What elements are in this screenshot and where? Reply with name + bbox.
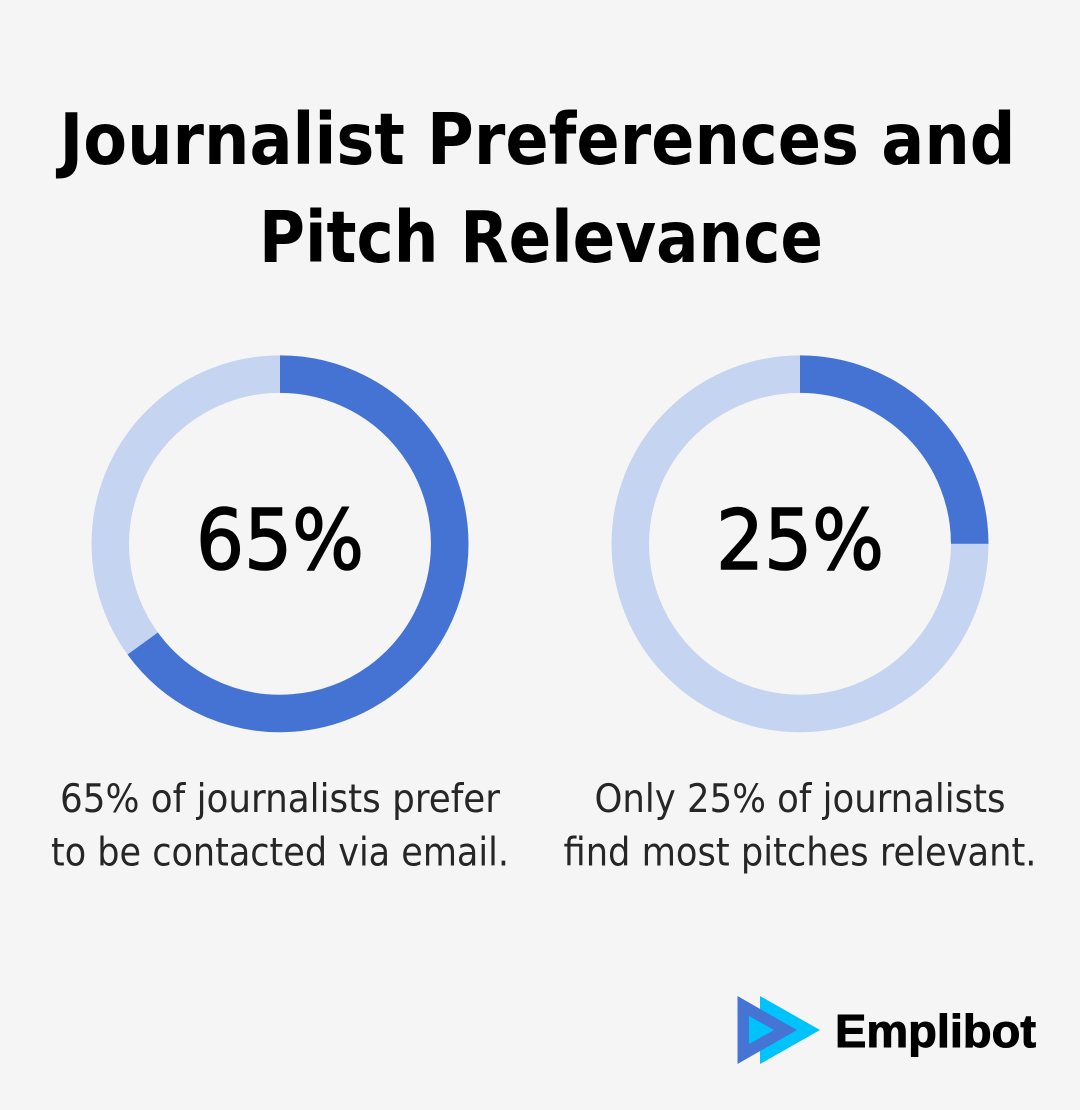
caption: email preference: 65% of journalists prefer bbox=[60, 777, 501, 822]
caption: email preference: to be contacted via email. bbox=[51, 830, 509, 876]
title bbox=[56, 98, 1016, 279]
logo: Emplibot bbox=[738, 996, 1036, 1064]
caption: pitch relevance: find most pitches relevant. bbox=[564, 830, 1036, 876]
caption: pitch relevance bbox=[564, 777, 1036, 876]
icon: play triangles bbox=[738, 996, 820, 1064]
donut chart: 25% bbox=[630, 374, 970, 714]
donut chart: 65%: 65% bbox=[196, 492, 364, 589]
logo wordmark: Emplibot bbox=[835, 1005, 1036, 1057]
donut chart: 25%: 25% bbox=[716, 492, 884, 589]
caption: email preference bbox=[51, 777, 509, 876]
title: Pitch Relevance bbox=[259, 196, 823, 279]
donut chart: 65% bbox=[110, 374, 450, 714]
caption: pitch relevance: Only 25% of journalists bbox=[594, 777, 1006, 822]
